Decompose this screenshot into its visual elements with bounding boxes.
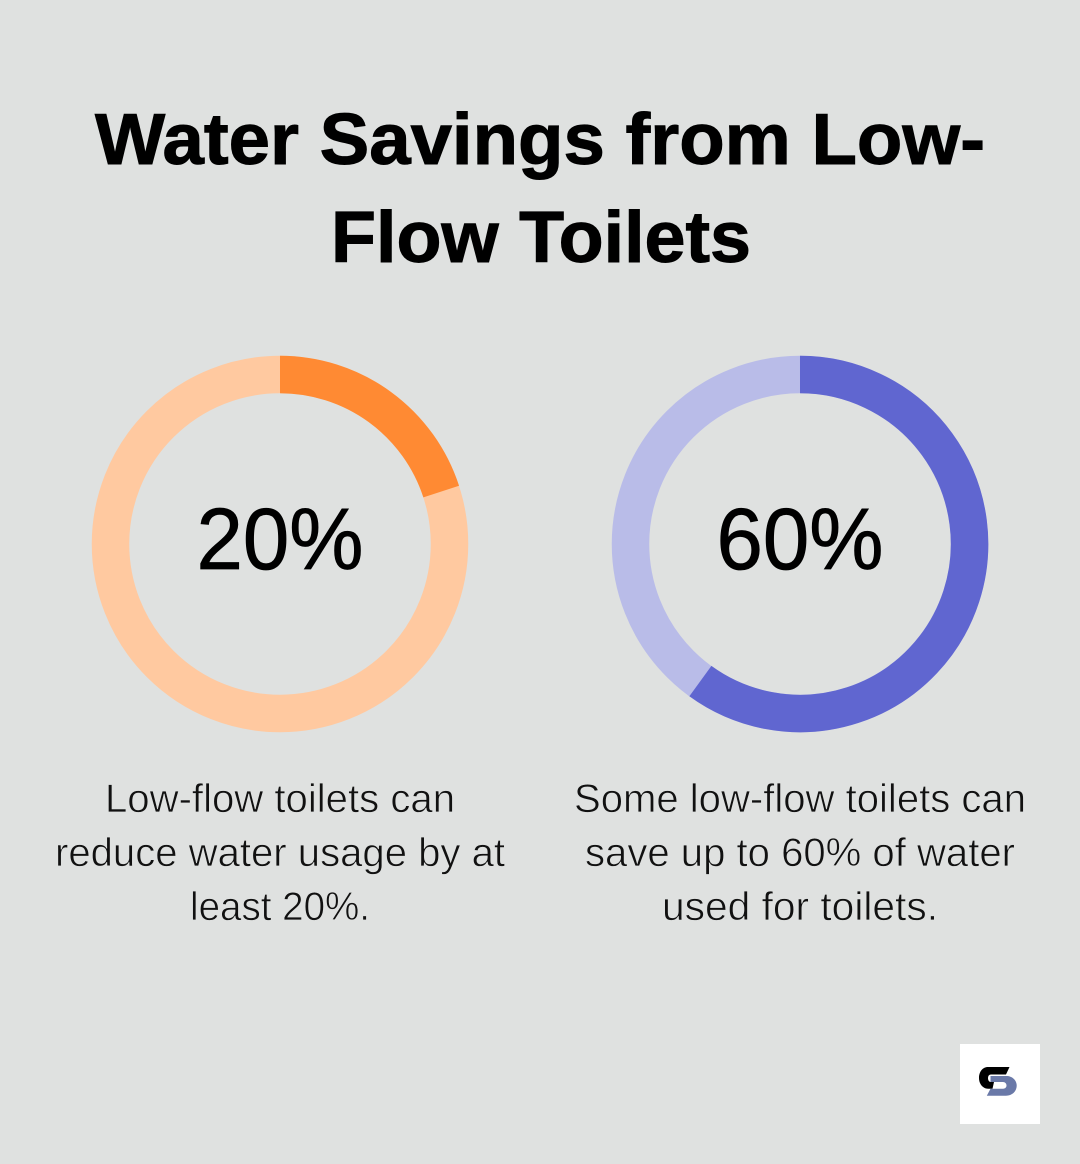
- value: 60%: 60%: [716, 491, 884, 588]
- description: 20%: [55, 777, 505, 929]
- description: 20%: least 20%.: [190, 885, 370, 929]
- description: 20%: reduce water usage by at: [55, 831, 505, 875]
- panel: 20% statistic: [55, 374, 505, 929]
- description: 60%: [574, 777, 1026, 929]
- donut chart: 60%: [630, 374, 970, 714]
- title: Flow Toilets: [331, 198, 751, 278]
- title: [95, 100, 985, 278]
- icon: logo badge: [960, 1044, 1040, 1124]
- donut chart: 20%: [110, 374, 450, 714]
- description: 60%: used for toilets.: [662, 885, 938, 929]
- description: 60%: Some low-flow toilets can: [574, 777, 1026, 821]
- description: 60%: save up to 60% of water: [585, 831, 1015, 875]
- title: Water Savings from Low-: [95, 100, 985, 180]
- value: 20%: 20%: [196, 491, 364, 588]
- panel: 60% statistic: [574, 374, 1026, 929]
- description: 20%: Low-flow toilets can: [105, 777, 455, 821]
